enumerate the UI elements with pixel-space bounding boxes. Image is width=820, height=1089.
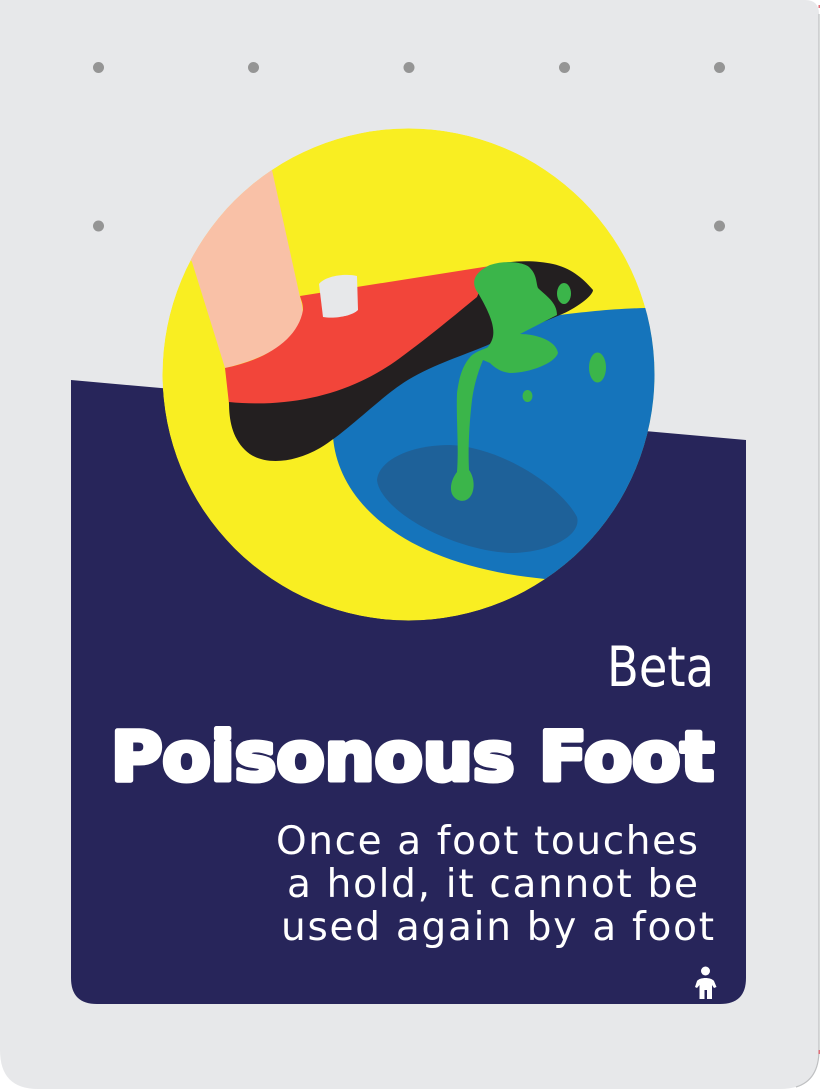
illustration: poisonous foot bbox=[150, 128, 680, 620]
card right edge bbox=[796, 14, 819, 1087]
rule description: Once a foot touches bbox=[276, 819, 698, 864]
edge tick marks bbox=[818, 5, 820, 1054]
peg dots bbox=[93, 62, 725, 232]
black sole and toe bbox=[229, 261, 593, 461]
white chalk mark bbox=[319, 275, 358, 318]
skin: ankle bbox=[191, 170, 303, 368]
navy panel bbox=[71, 380, 746, 1004]
icon: child figure bbox=[695, 966, 716, 999]
yellow disc bbox=[162, 128, 654, 620]
blue hold bbox=[333, 308, 654, 579]
slime drops bbox=[522, 283, 606, 402]
rule description: used again by a foot bbox=[281, 905, 714, 950]
red shoe bbox=[225, 266, 500, 410]
grade label: Beta bbox=[607, 635, 714, 699]
title: Poisonous Foot bbox=[111, 718, 714, 797]
rule description: a hold, it cannot be bbox=[287, 862, 698, 907]
hold shadow bbox=[377, 445, 578, 553]
rule description bbox=[276, 819, 714, 950]
green slime bbox=[451, 262, 558, 501]
